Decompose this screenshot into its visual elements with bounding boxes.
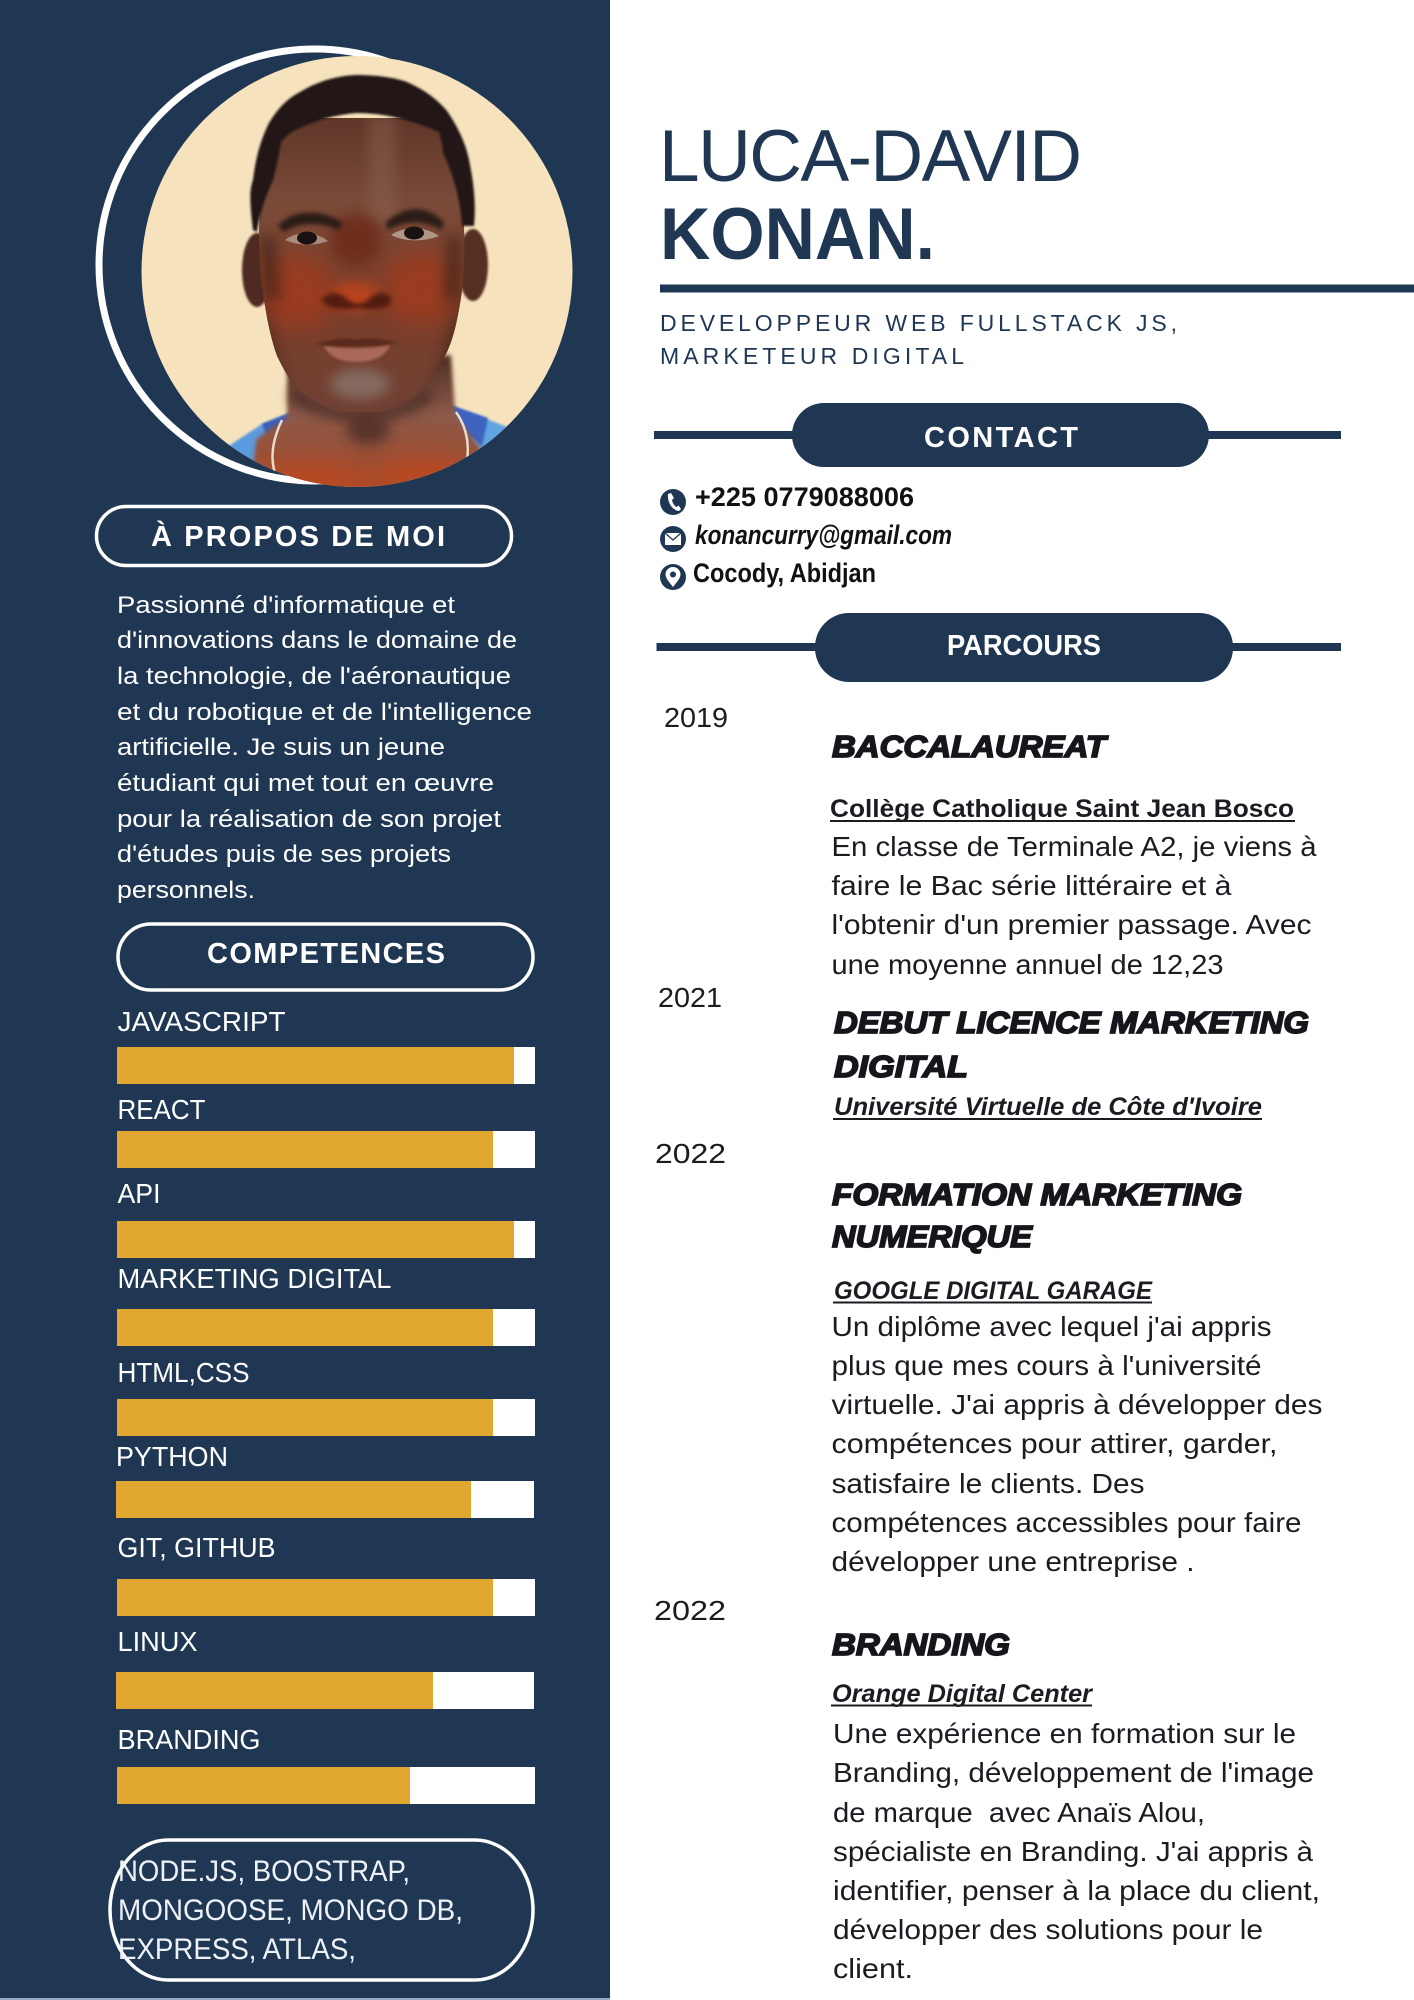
timeline entry 2019: Collège Catholique Saint Jean Bosco (830, 795, 1294, 823)
job title: MARKETEUR DIGITAL (660, 343, 964, 369)
skill: Python: PYTHON (116, 1441, 228, 1472)
title rule (660, 284, 1414, 292)
job title (660, 310, 1177, 369)
icon: location pin (660, 564, 686, 590)
name title: LUCA-DAVID (659, 116, 1082, 197)
icon: phone (660, 489, 686, 515)
skill: Git, GitHub (117, 1532, 535, 1616)
heading: Contact: CONTACT (924, 422, 1078, 454)
about text block: artificielle. Je suis un jeune (117, 734, 445, 761)
skill: HTML, CSS (117, 1357, 535, 1436)
job title: DEVELOPPEUR WEB FULLSTACK JS, (660, 310, 1177, 336)
other tools callout: EXPRESS, ATLAS, (118, 1933, 356, 1966)
portrait photo (142, 56, 572, 487)
timeline entry 2022 branding (654, 1595, 1320, 1984)
timeline entry 2019: En classe de Terminale A2, je viens à (832, 831, 1317, 862)
about text block: la technologie, de l'aéronautique (117, 663, 511, 690)
skill: Marketing digital: MARKETING DIGITAL (118, 1263, 392, 1294)
timeline entry 2019: 2019 (664, 702, 728, 733)
heading: Compétences (118, 924, 533, 990)
timeline entry 2021: 2021 (658, 982, 722, 1013)
about text block: d'innovations dans le domaine de (117, 627, 517, 654)
timeline entry 2021: DEBUT LICENCE MARKETING (834, 1005, 1309, 1040)
nose (322, 293, 392, 309)
timeline entry 2022 formation: satisfaire le clients. Des (832, 1468, 1144, 1499)
heading: À propos de moi (96, 506, 512, 566)
eyes (285, 233, 328, 245)
timeline entry 2022 branding: BRANDING (832, 1627, 1010, 1662)
timeline entry 2022 branding: spécialiste en Branding. J'ai appris à (833, 1836, 1314, 1867)
timeline entry 2022 branding: Orange Digital Center (832, 1680, 1093, 1708)
timeline entry 2019: faire le Bac série littéraire et à (832, 870, 1232, 901)
timeline entry 2019 (664, 702, 1317, 980)
neck and chest (250, 355, 490, 500)
timeline entry 2022 formation: compétences pour attirer, garder, (832, 1428, 1278, 1459)
timeline entry 2022 formation: développer une entreprise . (832, 1546, 1194, 1577)
timeline entry 2021: Université Virtuelle de Côte d'Ivoire (834, 1093, 1262, 1121)
timeline entry 2022 formation (655, 1138, 1322, 1577)
about text block: étudiant qui met tout en œuvre (117, 770, 494, 797)
location: Cocody, Abidjan (693, 558, 876, 588)
name title (659, 116, 1082, 275)
about text block: et du robotique et de l'intelligence (117, 699, 532, 726)
heading: Compétences: COMPETENCES (207, 938, 445, 970)
necklace (271, 420, 284, 472)
timeline entry 2022 formation: GOOGLE DIGITAL GARAGE (834, 1277, 1153, 1305)
shirt (228, 412, 306, 481)
heading: À propos de moi: À PROPOS DE MOI (151, 519, 445, 553)
timeline entry 2022 branding: de marque avec Anaïs Alou, (833, 1797, 1205, 1828)
timeline entry 2022 formation: 2022 (655, 1138, 726, 1169)
timeline entry 2021 (658, 982, 1309, 1121)
heading: Contact (654, 403, 1341, 467)
timeline entry 2022 branding: développer des solutions pour le (833, 1914, 1263, 1945)
about text block (117, 592, 532, 904)
skill bars chart (116, 1006, 535, 1804)
ears (240, 232, 264, 309)
timeline entry 2022 branding: client. (833, 1953, 913, 1984)
timeline entry 2019: BACCALAUREAT (832, 729, 1109, 764)
name title: KONAN. (660, 194, 935, 275)
heading: Parcours (656, 613, 1341, 682)
skill: Branding (117, 1724, 535, 1804)
skill: Marketing digital (117, 1263, 535, 1346)
hair (250, 75, 475, 232)
timeline entry 2019: l'obtenir d'un premier passage. Avec (832, 909, 1312, 940)
decorative ring behind portrait (99, 49, 531, 481)
heading: Parcours: PARCOURS (947, 630, 1101, 662)
timeline entry 2022 formation: compétences accessibles pour faire (832, 1507, 1302, 1538)
icon: email (660, 526, 686, 552)
about text block: personnels. (117, 877, 255, 904)
skill: JavaScript (117, 1006, 535, 1084)
timeline entry 2022 formation: NUMERIQUE (832, 1219, 1033, 1254)
timeline entry 2022 formation: Un diplôme avec lequel j'ai appris (832, 1311, 1272, 1342)
other tools callout (110, 1840, 533, 1980)
brows (278, 213, 342, 232)
timeline entry 2022 formation: plus que mes cours à l'université (832, 1350, 1262, 1381)
about text block: Passionné d'informatique et (117, 592, 455, 619)
lips (316, 338, 397, 347)
about text block: d'études puis de ses projets (117, 841, 451, 868)
skill: Python (116, 1441, 534, 1518)
skill: API (117, 1178, 535, 1258)
skill: JavaScript: JAVASCRIPT (118, 1006, 286, 1037)
skill: Branding: BRANDING (118, 1724, 260, 1755)
timeline entry 2022 formation: FORMATION MARKETING (832, 1177, 1242, 1212)
sidebar panel (0, 0, 610, 2000)
face (259, 118, 464, 412)
timeline entry 2022 formation: virtuelle. J'ai appris à développer des (832, 1389, 1322, 1420)
timeline entry 2022 branding: Une expérience en formation sur le (833, 1718, 1296, 1749)
timeline entry 2022 branding: Branding, développement de l'image (833, 1757, 1314, 1788)
skill: API: API (118, 1178, 160, 1209)
skill: HTML, CSS: HTML,CSS (118, 1357, 250, 1388)
phone number: +225 0779088006 (695, 482, 914, 512)
skill: React (117, 1094, 535, 1168)
timeline entry 2022 branding: 2022 (654, 1595, 726, 1626)
skill: Linux: LINUX (118, 1626, 198, 1657)
about text block: pour la réalisation de son projet (117, 806, 501, 833)
skill: Git, GitHub: GIT, GITHUB (118, 1532, 276, 1563)
other tools callout: NODE.JS, BOOSTRAP, (118, 1855, 410, 1888)
timeline entry 2021: DIGITAL (834, 1049, 968, 1084)
timeline entry 2019: une moyenne annuel de 12,23 (832, 949, 1224, 980)
other tools callout: MONGOOSE, MONGO DB, (118, 1894, 463, 1927)
timeline entry 2022 branding: identifier, penser à la place du client, (833, 1875, 1320, 1906)
skill: React: REACT (118, 1094, 206, 1125)
contact details (660, 482, 952, 590)
skill: Linux (116, 1626, 534, 1709)
email address: konancurry@gmail.com (695, 520, 952, 550)
